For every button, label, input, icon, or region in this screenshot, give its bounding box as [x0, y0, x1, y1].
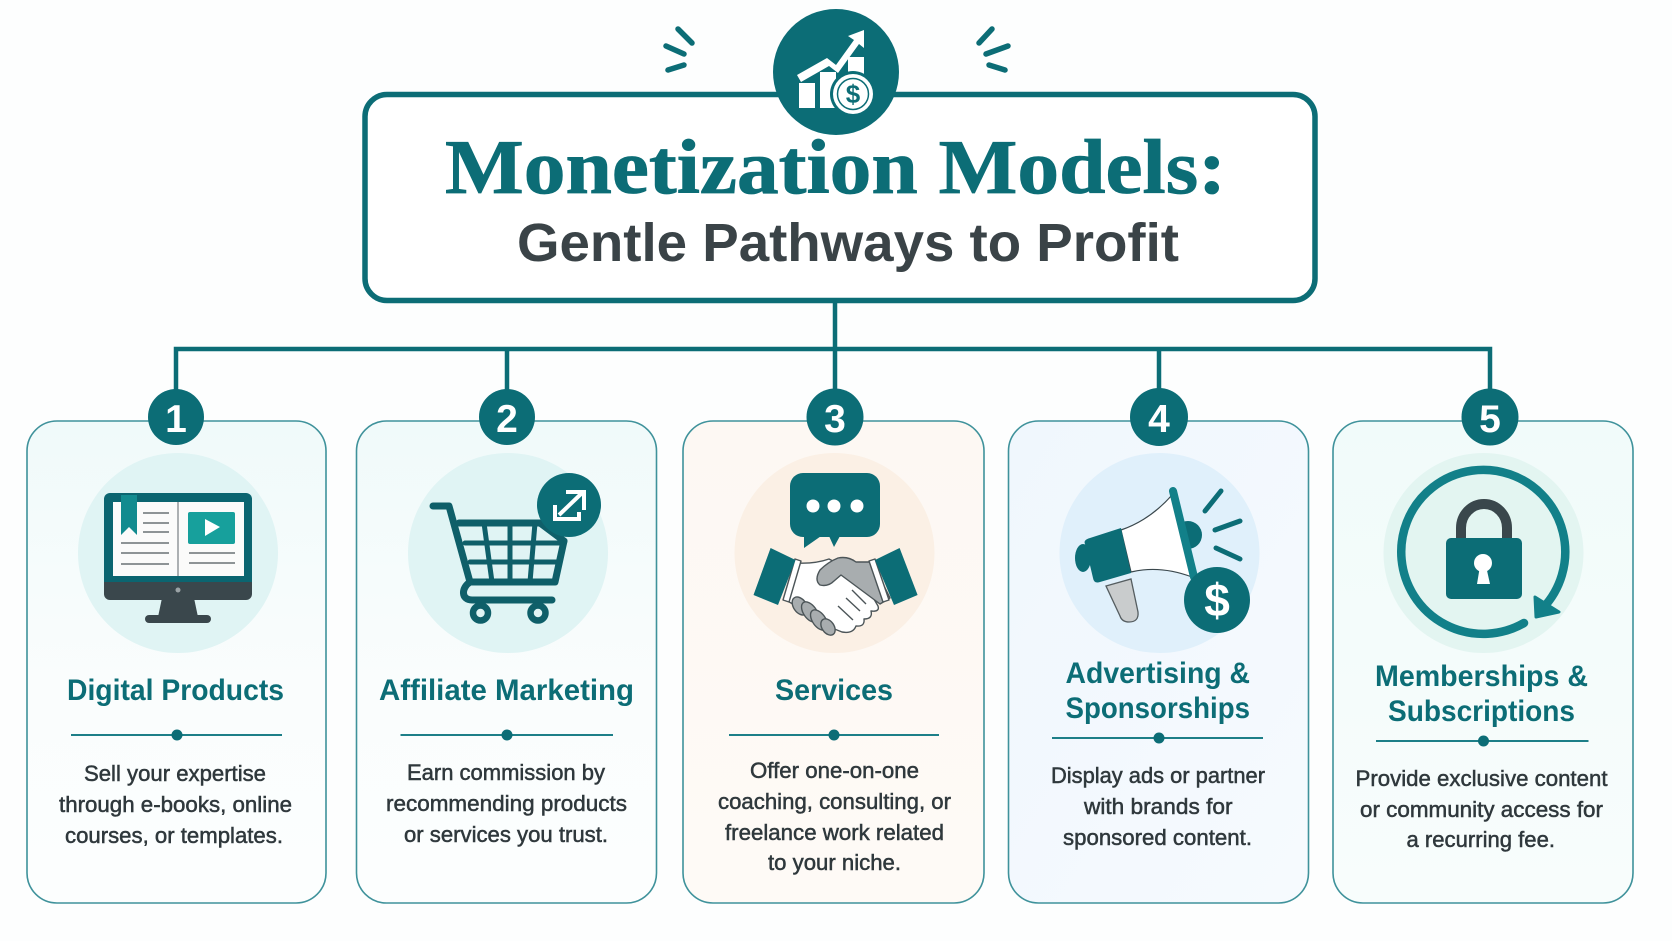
icon: shopping cart — [433, 506, 564, 620]
icon circle background — [734, 453, 934, 653]
description: Earn commission by — [407, 760, 605, 785]
description: freelance work related — [725, 820, 944, 845]
heading: Digital Products — [67, 674, 284, 707]
icon: external link badge — [537, 473, 601, 537]
number badge 2: 2 — [496, 398, 518, 441]
divider — [1052, 732, 1263, 744]
description — [1356, 766, 1608, 852]
icon: padlock — [1446, 504, 1522, 599]
description — [59, 761, 292, 848]
description — [386, 760, 627, 847]
number badge 5 — [1462, 388, 1518, 446]
title: Monetization Models: — [445, 124, 1226, 210]
description: coaching, consulting, or — [718, 789, 951, 814]
description: a recurring fee. — [1406, 827, 1555, 852]
divider — [1376, 736, 1588, 746]
icon circle background — [1060, 453, 1260, 653]
description: to your niche. — [768, 850, 901, 875]
description — [1051, 763, 1265, 850]
divider — [729, 730, 939, 740]
panel: advertising and sponsorships — [1008, 388, 1308, 903]
number badge 3 — [806, 388, 864, 446]
connector lines — [176, 303, 1490, 395]
description: Provide exclusive content — [1356, 766, 1608, 791]
number badge 5: 5 — [1479, 398, 1501, 441]
subtitle: Gentle Pathways to Profit — [517, 213, 1179, 273]
description: recommending products — [386, 791, 627, 816]
panel: affiliate marketing — [356, 389, 656, 903]
heading: Subscriptions — [1388, 695, 1575, 728]
number badge 3: 3 — [824, 398, 846, 441]
heading: Advertising & — [1066, 657, 1250, 690]
icon: dollar badge — [1184, 567, 1250, 633]
description: with brands for — [1083, 794, 1232, 819]
description: Offer one-on-one — [750, 758, 919, 783]
description: or community access for — [1360, 797, 1603, 822]
number badge 2 — [479, 389, 535, 445]
icon: dollar badge: $ — [1204, 574, 1230, 626]
number badge 4 — [1130, 388, 1188, 446]
description: through e-books, online — [59, 792, 292, 817]
heading: Services — [775, 674, 893, 707]
icon: monitor with open book and video — [104, 493, 252, 619]
description: sponsored content. — [1063, 825, 1252, 850]
description: or services you trust. — [404, 822, 608, 847]
icon: growth chart with coin — [773, 9, 899, 135]
icon circle background — [408, 453, 608, 653]
description: courses, or templates. — [65, 823, 283, 848]
heading: Memberships & — [1375, 660, 1588, 693]
icon: megaphone — [1075, 491, 1240, 622]
icon: handshake — [754, 548, 918, 638]
description — [718, 758, 951, 875]
number badge 1: 1 — [165, 398, 187, 441]
icon circle background — [1384, 453, 1584, 653]
icon: chat bubble — [790, 473, 880, 548]
panel: digital products — [27, 389, 326, 903]
panel: memberships and subscriptions — [1333, 388, 1633, 903]
icon circle background — [78, 453, 278, 653]
icon: sparkle rays right — [979, 29, 1008, 70]
description: Display ads or partner — [1051, 763, 1265, 788]
icon: sparkle rays left — [666, 29, 692, 70]
divider — [400, 730, 613, 740]
number badge 4: 4 — [1148, 398, 1170, 441]
number badge 1 — [148, 389, 204, 445]
icon: growth chart with coin: $ — [846, 79, 861, 109]
heading — [1066, 657, 1250, 725]
heading — [1375, 660, 1588, 728]
icon: recurring arrow ring — [1401, 470, 1565, 634]
heading: Affiliate Marketing — [379, 674, 634, 707]
heading: Sponsorships — [1066, 692, 1250, 725]
header title box — [365, 94, 1315, 300]
divider — [71, 730, 282, 740]
panel: services — [683, 388, 984, 903]
description: Sell your expertise — [84, 761, 266, 786]
